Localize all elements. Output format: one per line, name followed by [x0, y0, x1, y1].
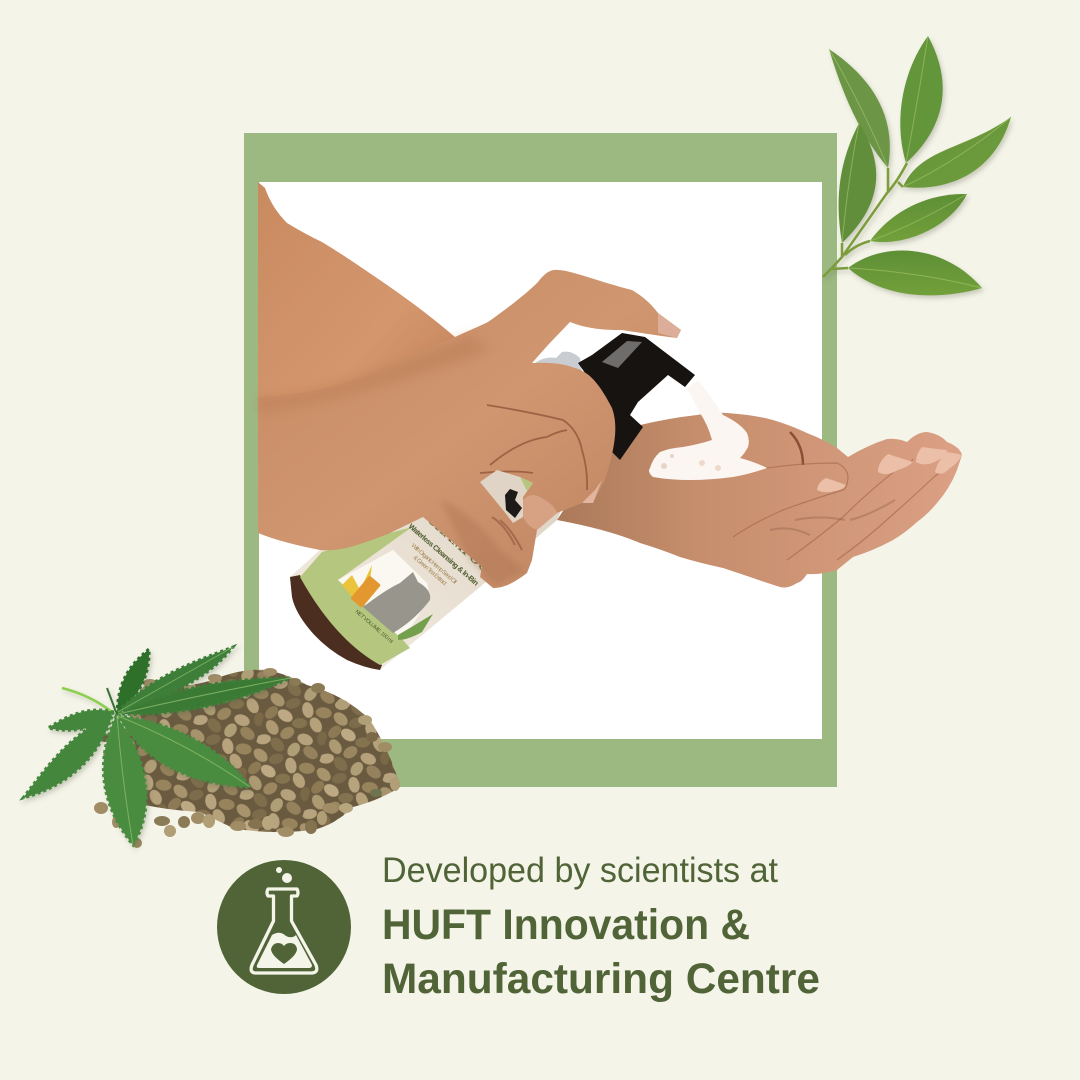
bottle label text: Waterless Cleansing & In-Bin: [407, 522, 481, 588]
pump head: [578, 333, 695, 460]
heading line two: Manufacturing Centre: [382, 955, 820, 1003]
icon: top-right tea leaf sprig: [823, 36, 1011, 295]
bottle body: [290, 420, 600, 670]
bottle label text: & Green Tea Extract: [412, 555, 448, 587]
pump collar: [535, 352, 582, 372]
bottle label text: NET VOLUME: 150 ml: [354, 609, 394, 645]
hand shading: [258, 335, 490, 412]
green label band: [300, 527, 412, 665]
nails: [817, 447, 962, 492]
panel: green frame: [244, 133, 837, 787]
panel: white photo area: [259, 182, 822, 739]
finger tip in front of bottle: [523, 495, 557, 530]
bottle base: [290, 575, 382, 670]
subheading: Developed by scientists at: [382, 851, 778, 890]
text block: developed by: [382, 851, 820, 1003]
heading line one: HUFT Innovation &: [382, 901, 750, 949]
photo: foam: [649, 380, 767, 480]
photo: forearm: [258, 182, 470, 420]
icon: pile of hemp seeds: [94, 668, 400, 848]
finger nails: [658, 313, 681, 338]
finger creases: [480, 405, 587, 490]
stem: [823, 163, 907, 277]
icon: hemp leaf: [23, 647, 290, 845]
bottle label text: [354, 513, 494, 645]
photo: receiving hand: [557, 413, 962, 588]
bottle label text: With Organic Hemp Seed Oil: [410, 543, 457, 586]
photo: pump bottle: [290, 333, 695, 670]
bottle illustration: [338, 550, 430, 640]
photo: hand gripping pump: [258, 270, 681, 588]
edge and loose seeds: [94, 668, 400, 848]
visible bottle between fingers: [480, 470, 533, 523]
icon: flask badge: [217, 860, 351, 994]
bottle label text: SHAMPOO: [425, 513, 494, 577]
